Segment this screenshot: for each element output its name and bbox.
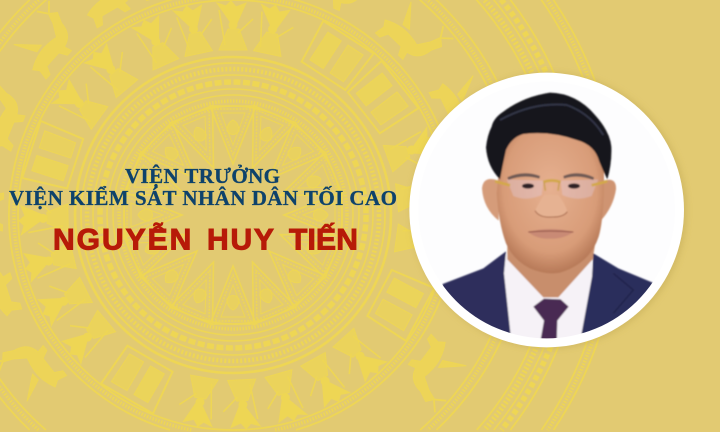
nose (536, 200, 566, 216)
suit left (442, 250, 512, 334)
animals ring (0, 0, 517, 413)
inner ring bands (75, 57, 391, 373)
photo background (400, 60, 700, 360)
ears (482, 179, 499, 221)
white frame (409, 73, 684, 347)
lenses (507, 179, 543, 199)
title line 1: VIỆN TRƯỞNG (125, 164, 280, 188)
neck (506, 246, 596, 298)
glasses bridge (495, 180, 607, 185)
frame shadow (411, 73, 687, 349)
warriors ring (19, 1, 448, 430)
heading: position title (9, 164, 397, 210)
suit right (580, 252, 653, 334)
hair (486, 93, 611, 179)
central star rays (123, 105, 343, 325)
title line 2: VIỆN KIỂM SÁT NHÂN DÂN TỐI CAO (9, 186, 397, 210)
mouth (528, 229, 573, 239)
eyes (522, 183, 534, 189)
name: HUY (207, 224, 276, 256)
face (497, 127, 604, 273)
name: TIẾN (289, 222, 358, 256)
shirt (503, 254, 593, 343)
middle ring bands (9, 0, 457, 430)
name: NGUYỄN (53, 222, 193, 256)
eyebrows (507, 173, 540, 180)
tie (533, 299, 569, 343)
portrait photo (409, 72, 687, 350)
